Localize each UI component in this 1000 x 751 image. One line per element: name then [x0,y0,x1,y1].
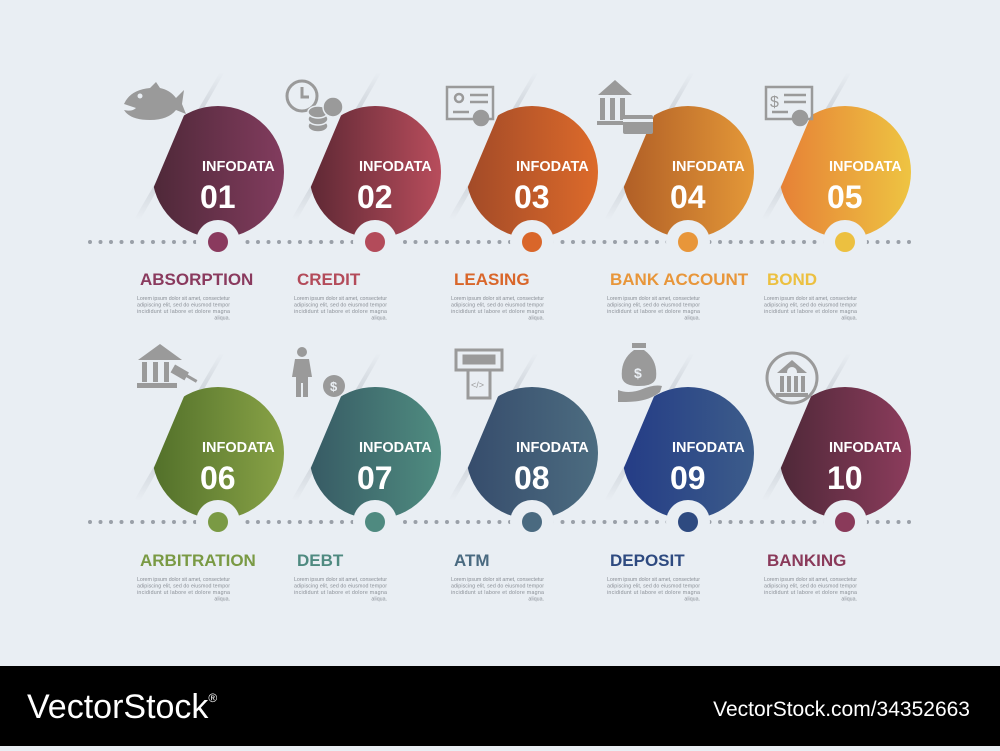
footer logo: VectorStock [27,688,208,726]
icon: person coin: $ [330,379,338,394]
labels: ARBITRATION [140,551,256,570]
step 03: INFODATA [516,159,589,175]
icon: bank gavel [137,344,197,388]
step 02: 02 [357,179,393,215]
step 10 [769,365,911,532]
labels: LEASING [454,270,530,289]
step 09: 09 [670,460,706,496]
step 09 [612,365,754,532]
labels: ABSORPTION [140,270,253,289]
labels [140,270,846,570]
step 10: 10 [827,460,863,496]
icon: clock coins [287,81,343,132]
description text blocks: Lorem ipsum dolor sit amet, consectetur [137,296,230,302]
footer bar [0,666,1000,746]
step 09: INFODATA [672,440,745,456]
dotted timeline row 1 [90,240,912,244]
description text blocks [137,296,857,602]
description text blocks: adipiscing elit, sed do eiusmod tempor [137,302,230,308]
icon: certificate [447,87,493,125]
icon: certificate 2: $ [770,94,779,111]
labels: BANK ACCOUNT [610,270,749,289]
step 08: 08 [514,460,550,496]
icon: money bag hand [618,343,662,402]
step 04 [612,84,754,252]
description text blocks: aliqua. [214,316,230,322]
labels: DEPOSIT [610,551,685,570]
step 06: 06 [200,460,236,496]
step 04: INFODATA [672,159,745,175]
step 01 [142,84,284,252]
icon: bank cycle [767,353,817,403]
step 08 [456,365,598,532]
labels: DEBT [297,551,344,570]
step 02 [299,84,441,252]
step 08: INFODATA [516,440,589,456]
labels: BANKING [767,551,846,570]
footer logo: ® [208,691,217,705]
icon: bank card [597,80,653,134]
step 05: INFODATA [829,159,902,175]
icon: certificate 2 [766,87,812,125]
step 03: 03 [514,179,550,215]
step 05 [769,84,911,252]
icon: fish [124,82,186,120]
icon: person coin [292,347,345,397]
icon: ATM: </> [471,380,484,390]
labels: ATM [454,551,490,570]
icon: money bag hand: $ [634,365,642,381]
labels: BOND [767,270,817,289]
step 07 [299,365,441,532]
step 10: INFODATA [829,440,902,456]
step 06 [142,365,284,532]
step 07: 07 [357,460,393,496]
footer url: VectorStock.com/34352663 [713,698,970,721]
step 07: INFODATA [359,440,432,456]
step 01: INFODATA [202,159,275,175]
description text blocks: incididunt ut labore et dolore magna [137,309,230,315]
labels: CREDIT [297,270,361,289]
step 04: 04 [670,179,706,215]
icon: ATM [456,350,502,398]
step 01: 01 [200,179,236,215]
step 02: INFODATA [359,159,432,175]
step 05: 05 [827,179,863,215]
step 03 [456,84,598,252]
dotted timeline row 2 [90,520,912,524]
step 06: INFODATA [202,440,275,456]
